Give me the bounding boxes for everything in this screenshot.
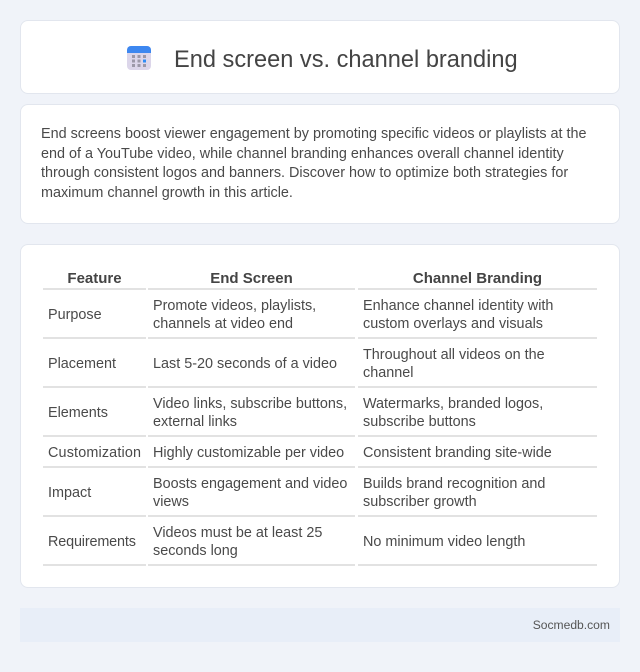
impact channel branding: subscriber growth (363, 494, 477, 510)
elements end screen: Video links, subscribe buttons, (153, 396, 347, 412)
customization end screen: Highly customizable per video (153, 445, 344, 461)
table panel (20, 244, 620, 588)
purpose end screen: Promote videos, playlists, (153, 298, 316, 314)
icon: calendar (127, 46, 151, 70)
elements channel branding: subscribe buttons (363, 414, 476, 430)
row: requirements: Requirements (48, 534, 136, 550)
impact end screen: views (153, 494, 189, 510)
requirements end screen: Videos must be at least 25 (153, 525, 322, 541)
purpose channel branding: custom overlays and visuals (363, 316, 543, 332)
intro panel (20, 104, 620, 224)
title: End screen vs. channel branding (174, 47, 518, 73)
placement channel branding: Throughout all videos on the (363, 347, 545, 363)
customization channel branding: Consistent branding site-wide (363, 445, 552, 461)
elements channel branding: Watermarks, branded logos, (363, 396, 543, 412)
footer text: Socmedb.com (533, 618, 610, 632)
intro text: End screens boost viewer engagement by promoting specific videos or playlists at the (41, 126, 587, 142)
intro text: end of a YouTube video, while channel branding enhances overall channel identity (41, 146, 564, 162)
impact channel branding: Builds brand recognition and (363, 476, 545, 492)
row: purpose: Purpose (48, 307, 102, 323)
impact end screen: Boosts engagement and video (153, 476, 347, 492)
placement channel branding: channel (363, 365, 413, 381)
requirements end screen: seconds long (153, 543, 238, 559)
intro text (41, 126, 587, 200)
impact channel branding (363, 476, 545, 510)
header: channel branding: Channel Branding (413, 270, 542, 287)
elements end screen (153, 396, 347, 430)
footer bar (20, 608, 620, 642)
elements channel branding (363, 396, 543, 430)
requirements end screen (153, 525, 322, 559)
title panel (20, 20, 620, 94)
row: impact: Impact (48, 485, 91, 501)
row: customization: Customization (48, 445, 141, 461)
intro text: through consistent logos and banners. Discover how to optimize both strategies for (41, 165, 568, 181)
elements end screen: external links (153, 414, 237, 430)
purpose end screen (153, 298, 316, 332)
impact end screen (153, 476, 347, 510)
placement channel branding (363, 347, 545, 381)
header: feature: Feature (67, 270, 122, 287)
purpose channel branding: Enhance channel identity with (363, 298, 553, 314)
row: placement: Placement (48, 356, 116, 372)
header: end screen: End Screen (210, 270, 293, 287)
purpose channel branding (363, 298, 553, 332)
intro text: maximum channel growth in this article. (41, 184, 293, 200)
purpose end screen: channels at video end (153, 316, 293, 332)
row: elements: Elements (48, 405, 108, 421)
placement end screen: Last 5-20 seconds of a video (153, 356, 337, 372)
requirements channel branding: No minimum video length (363, 534, 525, 550)
